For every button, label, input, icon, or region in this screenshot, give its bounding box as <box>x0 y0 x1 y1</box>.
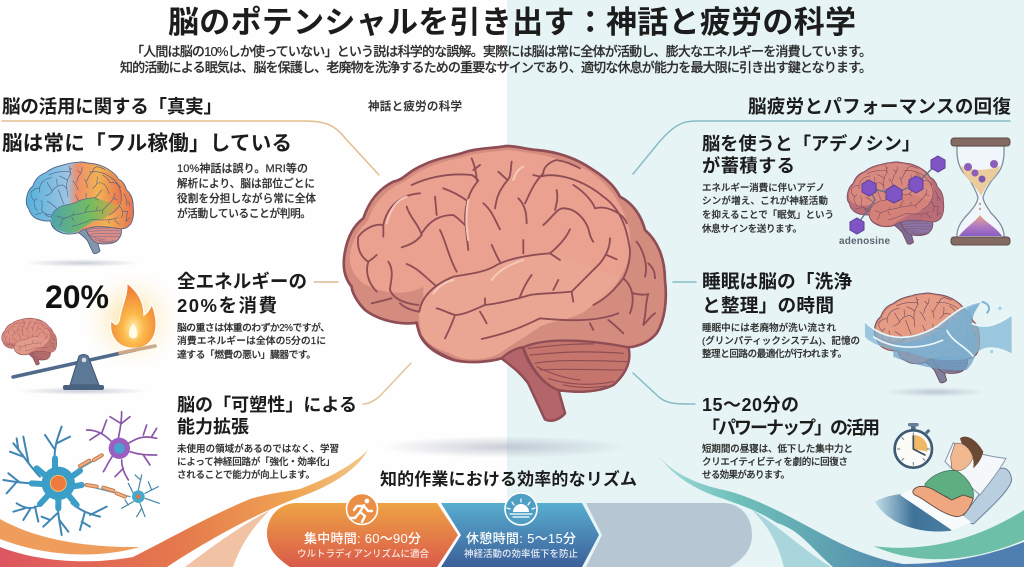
water brain shadow <box>885 387 985 397</box>
heading: plasticity <box>177 395 357 437</box>
heading: nap <box>702 395 880 438</box>
body text: エネルギー消費に伴いアデノ <box>702 182 825 194</box>
left section heading: 脳の活用に関する「真実」 <box>2 96 222 117</box>
panel: adenosine <box>702 133 1010 247</box>
body text <box>702 182 834 235</box>
intro text: 知的活動による眠気は、脳を保護し、老廃物を洗浄するための重要なサインであり、適切な休息が能力を最大限に引き出す鍵となります。 <box>120 60 872 75</box>
rest chevron <box>441 503 599 567</box>
body text: 解析により、脳は部位ごとに <box>177 177 315 190</box>
rhythm bar <box>267 493 752 567</box>
adenosine label: adenosine <box>839 236 890 247</box>
body text: 未使用の領域があるのではなく、学習 <box>177 443 339 455</box>
body text: 達する「燃費の悪い」臓器です。 <box>177 348 316 361</box>
icon: runner <box>346 494 378 524</box>
body text: によって神経回路が「強化・効率化」 <box>177 456 335 468</box>
icon: brain in water <box>874 293 980 383</box>
blanket <box>875 494 952 532</box>
rainbow brain shadow <box>24 259 140 267</box>
icon: stopwatch and sleeping person <box>875 423 1012 532</box>
panel: energy consumption <box>2 264 330 395</box>
body text <box>177 161 316 220</box>
sheet <box>900 487 972 530</box>
body text: 整理と回路の最適化が行われます。 <box>702 348 847 360</box>
bottom left orange wave <box>0 450 368 567</box>
body text: クリエイティビティを劇的に回復さ <box>702 456 848 468</box>
body text: されることで能力が向上します。 <box>177 469 315 481</box>
icon: seesaw <box>13 346 155 395</box>
right section heading: 脳疲労とパフォーマンスの回復 <box>748 96 1011 117</box>
heading: nap: 15〜20分の <box>702 395 799 415</box>
body text: を抑えることで「眠気」という <box>702 209 834 221</box>
icon: sunrise <box>505 493 537 525</box>
shirt <box>925 470 974 510</box>
icon: brain with adenosine <box>847 162 944 244</box>
body text: 休息サインを送ります。 <box>702 223 802 235</box>
intro text <box>120 44 872 75</box>
heading: adenosine: が蓄積する <box>702 155 795 176</box>
connector lines <box>2 121 1010 404</box>
focus chevron <box>267 503 458 567</box>
panel: power nap <box>702 395 1012 532</box>
body text: せる効果があります。 <box>702 469 790 481</box>
focus label: ウルトラディアンリズムに適合 <box>297 548 429 560</box>
heading: plasticity: 能力拡張 <box>177 417 249 437</box>
heading: adenosine: 脳を使うと「アデノシン」 <box>702 133 920 154</box>
rhythm heading: 知的作業における効率的なリズム <box>380 469 637 489</box>
body text: 消費エネルギーは全体の5分の1に <box>177 334 326 347</box>
heading: energy: 20%を消費 <box>177 295 277 316</box>
rest label: 神経活動の効率低下を防止 <box>464 548 578 560</box>
panel: plasticity <box>3 395 357 535</box>
empty grey chevron <box>586 503 752 567</box>
heading: plasticity: 脳の「可塑性」による <box>177 395 357 415</box>
body text: 10%神話は誤り。MRI等の <box>177 161 308 175</box>
icon: hourglass <box>951 138 1010 245</box>
icon: small brain <box>2 318 57 365</box>
arm <box>913 486 973 517</box>
body text: が活動していることが判明。 <box>177 207 311 220</box>
stopwatch <box>895 423 932 468</box>
focus label: 集中時間: 60〜90分 <box>304 531 421 546</box>
hair <box>960 437 983 468</box>
heading: energy <box>177 271 307 316</box>
body text: 短期間の昼寝は、低下した集中力と <box>702 443 853 455</box>
bed <box>960 468 1012 524</box>
body text <box>702 322 860 360</box>
body text <box>702 443 853 481</box>
bottom right teal wave <box>655 450 1024 567</box>
rest label: 休憩時間: 5〜15分 <box>466 531 576 546</box>
title: 脳のポテンシャルを引き出す：神話と疲労の科学 <box>168 5 856 40</box>
face <box>951 443 973 471</box>
body text <box>177 443 339 481</box>
heading: energy: 全エネルギーの <box>177 271 307 292</box>
rest label <box>464 531 578 560</box>
water wave <box>865 302 1012 370</box>
body text: 脳の重さは体重のわずか2%ですが、 <box>177 321 330 334</box>
large 20 percent: 20% <box>45 279 109 315</box>
focus label <box>297 531 429 560</box>
pillow <box>945 443 1006 495</box>
main brain illustration <box>344 146 666 421</box>
adenosine molecules <box>850 156 945 234</box>
heading: sleep <box>702 271 852 316</box>
body text: 睡眠中には老廃物が洗い流され <box>702 322 836 334</box>
icon: neurons <box>3 412 159 535</box>
intro text: 「人間は脳の10%しか使っていない」という説は科学的な誤解。実際には脳は常に全体が活動し、膨大なエネルギーを消費しています。 <box>131 44 872 59</box>
icon: rainbow brain <box>26 162 134 253</box>
heading: adenosine <box>702 133 920 176</box>
flame glow <box>76 264 188 376</box>
body text: 役割を分担しながら常に全体 <box>177 192 316 205</box>
heading: sleep: と整理」の時間 <box>702 295 834 316</box>
body text: (グリンパティックシステム)、記憶の <box>702 335 860 347</box>
icon: flame <box>110 283 156 348</box>
central brain shadow <box>380 436 630 458</box>
center label: 神話と疲労の科学 <box>368 99 462 113</box>
heading: full operation: 脳は常に「フル稼働」している <box>2 132 292 155</box>
body text: シンが増え、これが神経活動 <box>702 195 828 207</box>
body text <box>177 321 330 361</box>
panel: sleep <box>702 271 1012 397</box>
heading: sleep: 睡眠は脳の「洗浄 <box>702 271 852 292</box>
heading: nap: 「パワーナップ」の活用 <box>702 418 880 438</box>
panel: full activity <box>2 132 316 267</box>
